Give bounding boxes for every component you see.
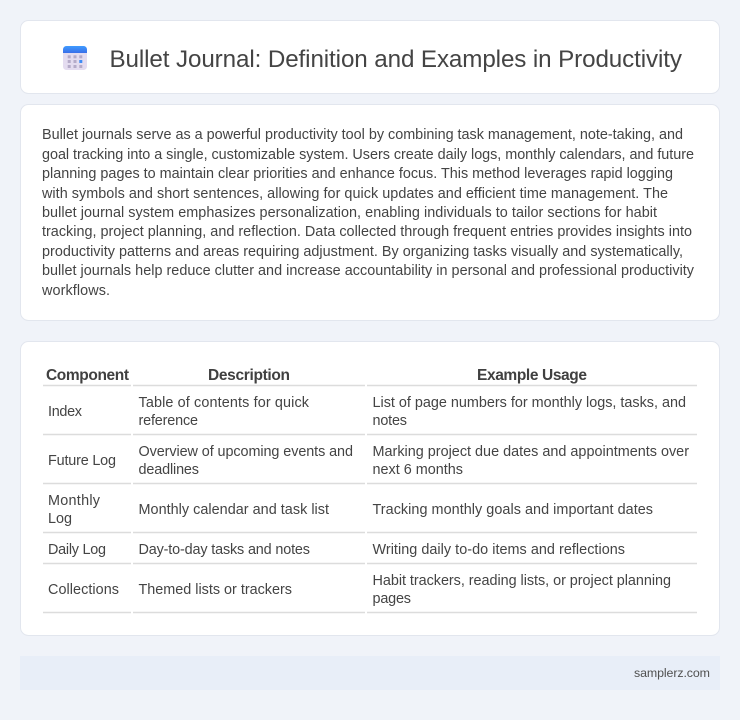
table header: Description bbox=[208, 367, 290, 384]
table row: Index: Table of contents for quick bbox=[138, 395, 310, 411]
table row: Collections: Collections bbox=[48, 582, 119, 598]
table row: Index: notes bbox=[372, 413, 407, 429]
table row: Collections: Themed lists or trackers bbox=[138, 582, 292, 598]
panel: components table card bbox=[20, 342, 720, 636]
table row: Future Log: deadlines bbox=[138, 462, 199, 478]
table row: Monthly Log: Monthly bbox=[48, 493, 101, 509]
table row: Daily Log: Daily Log bbox=[48, 542, 106, 558]
table row: Index bbox=[43, 395, 697, 434]
table row: Collections bbox=[43, 573, 697, 612]
panel: title card bbox=[20, 20, 720, 94]
icon: calendar bbox=[63, 46, 87, 70]
table row: Future Log: Marking project due dates and appointments over bbox=[372, 444, 689, 460]
table row: Daily Log bbox=[43, 542, 697, 564]
text block: summary paragraph: bullet journals help reduce clutter and increase accountability in personal and professional productivity bbox=[42, 263, 695, 279]
table row: Monthly Log: Monthly calendar and task list bbox=[138, 502, 329, 518]
table header: Component bbox=[46, 367, 129, 384]
table header: Example Usage bbox=[477, 367, 587, 384]
table header bbox=[43, 367, 697, 386]
table row: Index: List of page numbers for monthly logs, tasks, and bbox=[372, 395, 686, 411]
table row: Future Log bbox=[43, 444, 697, 484]
table row: Monthly Log bbox=[43, 493, 697, 532]
text block: summary paragraph bbox=[41, 127, 695, 299]
table row: Future Log: Overview of upcoming events and bbox=[138, 444, 353, 460]
text block: summary paragraph: with symbols and short sentences, allowing for quick updates and efficient time management. The bbox=[41, 186, 668, 202]
table row: Monthly Log: Tracking monthly goals and important dates bbox=[372, 502, 653, 518]
table row: Monthly Log: Log bbox=[48, 511, 72, 527]
text block: summary paragraph: planning pages to maintain clear priorities and enhance focus. This method leverages rapid logging bbox=[42, 166, 673, 182]
title: Bullet Journal: Definition and Examples in Productivity bbox=[110, 46, 683, 73]
table row: Collections: pages bbox=[372, 591, 411, 607]
text block: summary paragraph: goal tracking into a single, customizable system. Users create daily logs, monthly calendars, and future bbox=[42, 147, 694, 163]
table row: Daily Log: Writing daily to-do items and reflections bbox=[372, 542, 625, 558]
table row: Index: reference bbox=[138, 413, 198, 429]
table row: Collections: Habit trackers, reading lists, or project planning bbox=[372, 573, 671, 589]
panel: summary text card bbox=[20, 104, 720, 320]
text block: summary paragraph: tracking, project planning, and reflection. Data collected through frequent entries provides insights into bbox=[42, 224, 692, 240]
table row: Future Log: Future Log bbox=[48, 453, 116, 469]
text block: summary paragraph: workflows. bbox=[41, 283, 110, 299]
footer bbox=[20, 656, 720, 690]
text block: summary paragraph: productivity patterns and areas requiring adjustment. By organizing tasks visually and systematically, bbox=[42, 244, 683, 260]
footer credit: samplerz.com bbox=[634, 666, 710, 680]
text block: summary paragraph: bullet journal system emphasizes personalization, enabling individuals to tailor sections for habit bbox=[42, 205, 657, 221]
text block: summary paragraph: Bullet journals serve as a powerful productivity tool by combining task management, note-taking, and bbox=[42, 127, 683, 143]
table row: Index: Index bbox=[48, 404, 83, 420]
table row: Future Log: next 6 months bbox=[372, 462, 463, 478]
table row: Daily Log: Day-to-day tasks and notes bbox=[138, 542, 310, 558]
